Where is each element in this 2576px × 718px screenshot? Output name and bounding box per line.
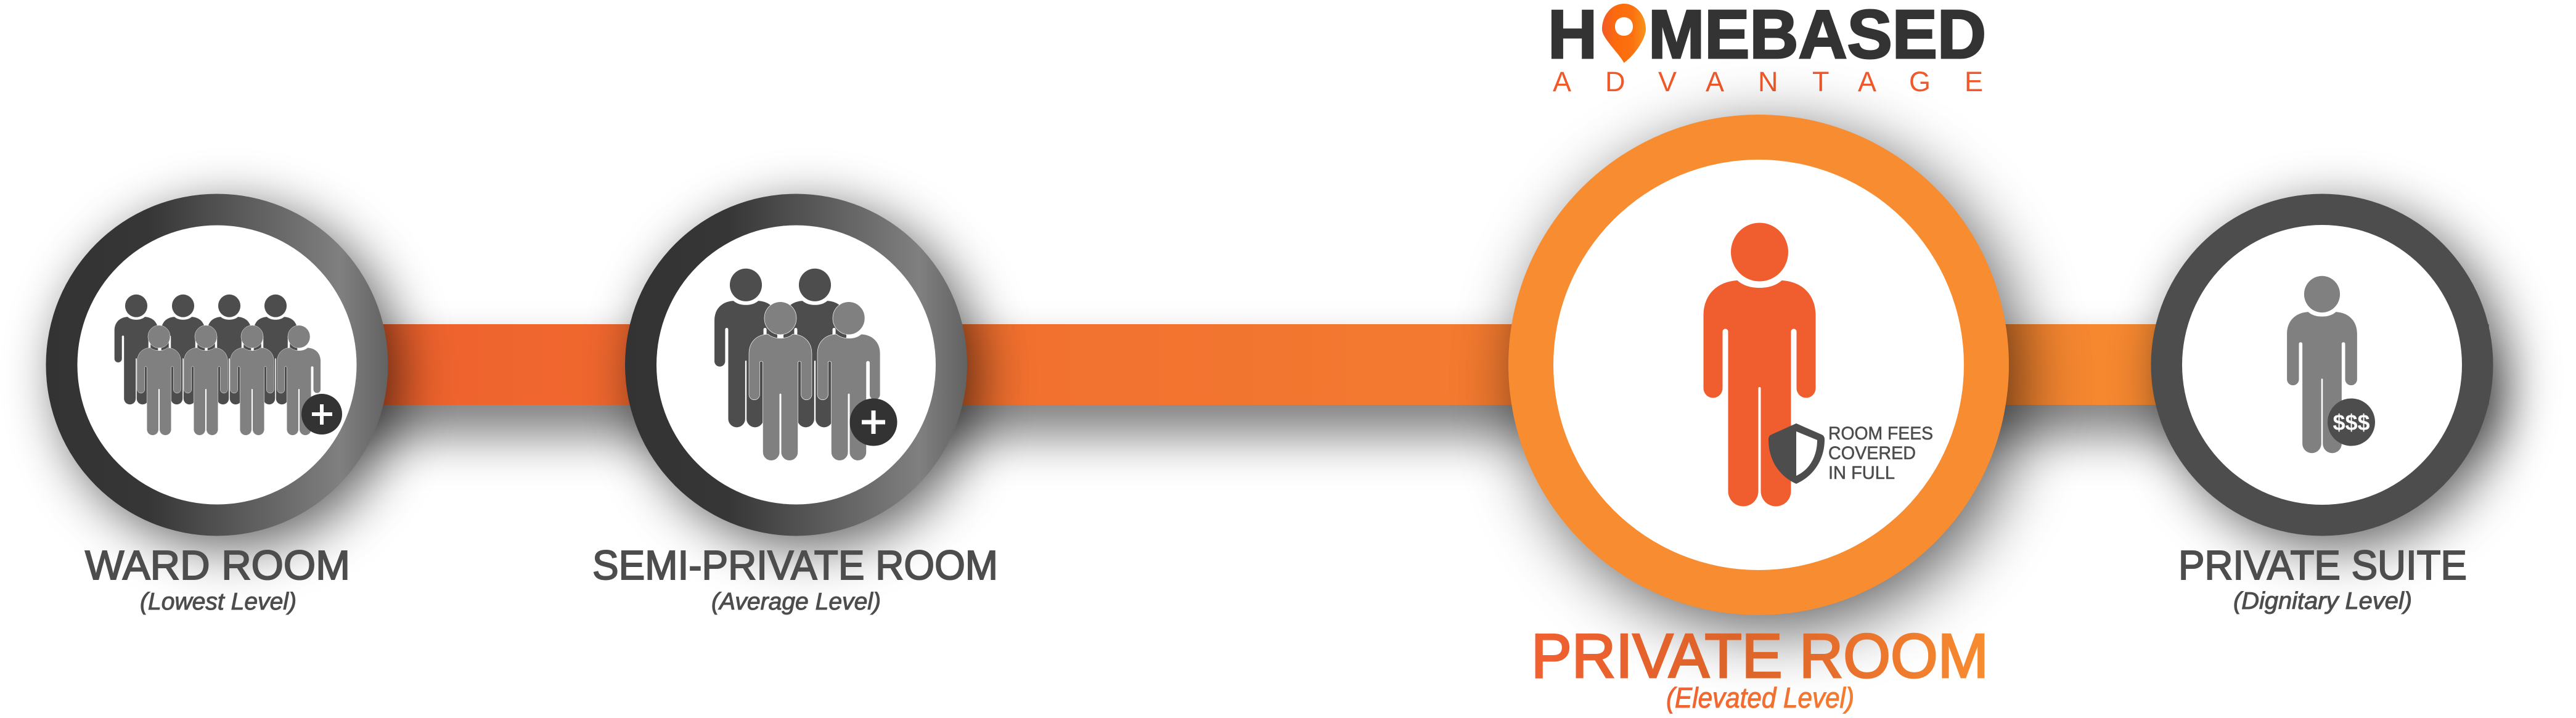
subheading: average level: (Average Level) <box>711 589 881 615</box>
callout: room fees covered in full: ROOM FEES <box>1828 423 1933 444</box>
panel: private room <box>1508 115 2021 714</box>
icon: price badge <box>2328 398 2375 446</box>
icon: semi-private occupants <box>714 269 880 460</box>
icon: plus badge <box>849 398 898 446</box>
icon: location pin <box>1602 4 1646 63</box>
subheading: elevated level: (Elevated Level) <box>1666 682 1854 714</box>
icon: single occupant <box>1704 223 1816 507</box>
icon: ward occupants <box>115 295 321 435</box>
callout: room fees covered in full <box>1828 423 1933 483</box>
heading: private room: PRIVATE ROOM <box>1531 622 1989 691</box>
heading: semi-private room: SEMI-PRIVATE ROOM <box>592 542 998 589</box>
icon: shield <box>1768 423 1825 484</box>
callout: room fees covered in full: COVERED <box>1828 443 1916 463</box>
logo: Homebased Advantage <box>1548 0 1986 97</box>
timeline bar <box>210 324 2490 436</box>
subheading: lowest level: (Lowest Level) <box>140 589 296 615</box>
panel: ward room <box>46 194 400 615</box>
heading: private suite: PRIVATE SUITE <box>2178 542 2467 589</box>
callout: room fees covered in full: IN FULL <box>1828 463 1895 483</box>
heading: ward room: WARD ROOM <box>85 542 350 589</box>
panel: private suite <box>2151 194 2505 614</box>
subheading: dignitary level: (Dignitary Level) <box>2233 588 2412 614</box>
icon: plus badge <box>301 394 342 434</box>
icon: dignitary occupant <box>2287 276 2357 453</box>
icon: price badge: $$$ <box>2333 410 2370 435</box>
logo tagline: ADVANTAGE <box>1553 66 1983 97</box>
panel: semi-private room <box>592 194 998 615</box>
